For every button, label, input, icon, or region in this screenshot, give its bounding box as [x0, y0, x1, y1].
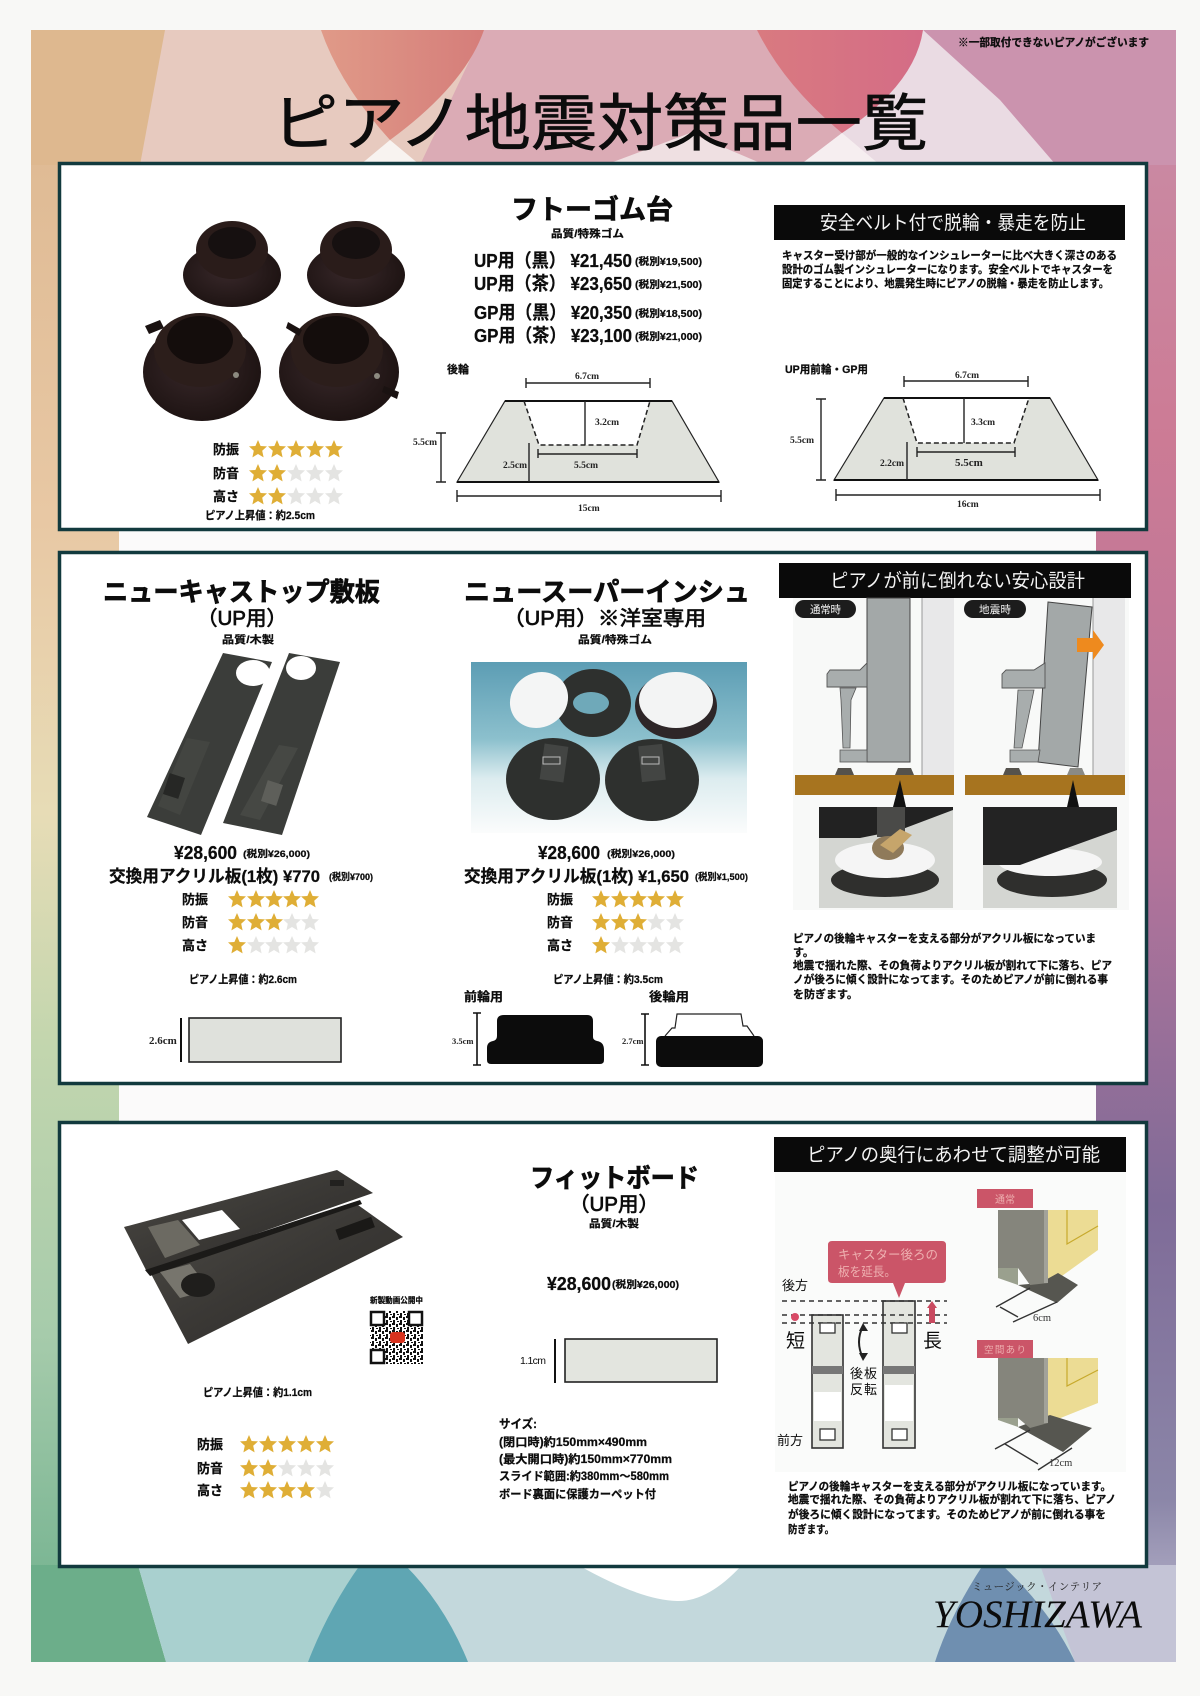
- material: 品質/木製: [589, 1217, 640, 1230]
- illustration: with space: [977, 1340, 1098, 1470]
- callout: [828, 1241, 946, 1298]
- description: [788, 1479, 1116, 1536]
- price: new castop: (税別¥700): [329, 871, 373, 883]
- diagram: front wheel and GP cross section: [785, 362, 1100, 510]
- illustration: with space: 空間あり: [984, 1345, 1026, 1356]
- price: new super insu: (税別¥1,500): [695, 871, 748, 883]
- diagram: rear wheel cross section: 2.5cm: [503, 461, 527, 471]
- description: 地震で揺れた際、その負荷よりアクリル板が割れて下に落ち、ピアノ: [788, 1492, 1116, 1506]
- lift value: new castop: ピアノ上昇値：約2.6cm: [189, 972, 297, 986]
- diagram: rear wheel profile: 後輪用: [649, 989, 689, 1004]
- rating: new castop: [182, 890, 319, 953]
- rating: [197, 1435, 334, 1498]
- diagram: front wheel and GP cross section: 2.2cm: [880, 459, 904, 469]
- title: ピアノ地震対策品一覧: [272, 90, 928, 159]
- price list: UP用（茶） ¥23,650: [474, 273, 632, 294]
- photo: super insulators: [471, 661, 747, 833]
- price list: UP用（黒） ¥21,450: [474, 250, 632, 271]
- rating: new super insu: 防音: [547, 915, 573, 930]
- banner: [779, 563, 1131, 598]
- diagram: rear wheel cross section: 5.5cm: [413, 438, 437, 448]
- description: ピアノの後輪キャスターを支える部分がアクリル板になっています。: [788, 1479, 1111, 1493]
- price: ¥28,600: [547, 1274, 611, 1294]
- label: earthquake: [964, 600, 1026, 618]
- size specification: [499, 1416, 672, 1501]
- diagram: front wheel profile: [452, 989, 604, 1065]
- description: を防ぎます。: [793, 987, 858, 1001]
- diagram: front wheel and GP cross section: 16cm: [957, 500, 979, 510]
- banner: 安全ベルト付で脱輪・暴走を防止: [820, 212, 1086, 234]
- size specification: ボード裏面に保護カーペット付: [499, 1487, 656, 1501]
- diagram: board adjustment: 後板: [850, 1366, 877, 1381]
- diagram: board thickness: 2.6cm: [149, 1035, 177, 1047]
- size specification: (最大開口時)約150mm×770mm: [499, 1452, 672, 1466]
- size specification: (閉口時)約150mm×490mm: [499, 1435, 647, 1449]
- material: 品質/特殊ゴム: [578, 633, 652, 646]
- illustration: normal position: 通常: [995, 1193, 1015, 1206]
- subtitle: （UP用）※洋室専用: [503, 607, 706, 630]
- subtitle: （UP用）: [569, 1193, 659, 1216]
- diagram: board thickness: [520, 1339, 717, 1383]
- description: 地震で揺れた際、その負荷よりアクリル板が割れて下に落ち、ピア: [793, 958, 1112, 972]
- QR code: 新製動画公開中: [370, 1295, 423, 1305]
- price: new castop: 交換用アクリル板(1枚) ¥770: [109, 866, 320, 886]
- diagram: rear wheel profile: [622, 989, 763, 1067]
- lift value: new super insu: ピアノ上昇値：約3.5cm: [553, 972, 663, 986]
- price: new castop: [109, 843, 373, 886]
- size specification: サイズ:: [499, 1416, 537, 1431]
- note: top right: ※一部取付できないピアノがございます: [958, 35, 1149, 49]
- rating: new castop: 高さ: [182, 938, 208, 953]
- price: new super insu: [464, 843, 748, 886]
- size specification: スライド範囲:約380mm～580mm: [499, 1469, 669, 1483]
- callout: キャスター後ろの: [838, 1248, 938, 1262]
- description: 設計のゴム製インシュレーターになります。安全ベルトでキャスターを: [782, 262, 1113, 276]
- illustration: normal position: [977, 1189, 1098, 1324]
- banner: [774, 205, 1125, 240]
- product title: フトーゴム台: [511, 194, 673, 225]
- logo: YOSHIZAWA: ミュージック・インテリア: [972, 1581, 1102, 1593]
- rating: 高さ: [197, 1483, 223, 1498]
- rating: new super insu: 高さ: [547, 938, 573, 953]
- description: 固定することにより、地震発生時にピアノの脱輪・暴走を防止します。: [782, 276, 1109, 290]
- material: 品質/特殊ゴム: [551, 227, 624, 240]
- arrow: tilt direction: [1077, 630, 1104, 660]
- price list: GP用（茶） ¥23,100: [474, 325, 632, 346]
- diagram: rear wheel cross section: 15cm: [578, 504, 600, 514]
- diagram: front wheel and GP cross section: 5.5cm: [790, 436, 814, 446]
- diagram: rear wheel cross section: 3.2cm: [595, 418, 619, 428]
- callout: 板を延長。: [838, 1265, 896, 1279]
- description: す。: [793, 946, 814, 959]
- price: (税別¥26,000): [612, 1278, 679, 1291]
- diagram: board thickness: 1.1cm: [520, 1355, 546, 1367]
- rating: 防振 防音 高さ: 防音: [213, 466, 239, 481]
- diagram: front wheel profile: 3.5cm: [452, 1036, 473, 1046]
- price: [547, 1274, 679, 1294]
- illustration: with space: 12cm: [1049, 1458, 1072, 1469]
- icon: wooden boards photo: [147, 653, 340, 835]
- price list: (税別¥21,000): [635, 330, 702, 343]
- photo: fit board: [124, 1170, 403, 1344]
- banner: [774, 1137, 1126, 1172]
- rating: 防音: [197, 1461, 223, 1476]
- diagram: board adjustment: 反転: [850, 1382, 877, 1397]
- lift value: ピアノ上昇値：約1.1cm: [203, 1385, 312, 1399]
- banner: ピアノが前に倒れない安心設計: [830, 570, 1085, 592]
- price list: (税別¥19,500): [635, 255, 702, 268]
- rating: new castop: 防振: [182, 892, 208, 907]
- price: new super insu: 交換用アクリル板(1枚) ¥1,650: [464, 866, 689, 886]
- banner: ピアノの奥行にあわせて調整が可能: [807, 1144, 1100, 1166]
- lift value: ピアノ上昇値：約2.5cm: [205, 508, 315, 522]
- illustration: piano normal vs earthquake: [793, 598, 1129, 910]
- photo: caster earthquake: [983, 780, 1117, 908]
- description: [793, 931, 1112, 1001]
- product title: new super insu: ニュースーパーインシュ: [464, 577, 750, 607]
- price list: (税別¥21,500): [635, 278, 702, 291]
- product title: フィットボード: [530, 1163, 699, 1193]
- price: new super insu: (税別¥26,000): [607, 848, 675, 860]
- panel: フトーゴム台: [60, 164, 1146, 530]
- piano: normal: [827, 598, 954, 775]
- price: new castop: (税別¥26,000): [243, 848, 310, 860]
- description: ピアノの後輪キャスターを支える部分がアクリル板になっていま: [793, 931, 1096, 945]
- description: が後ろに傾く設計になってます。そのためピアノが前に倒れる事を: [788, 1507, 1106, 1521]
- rating: 防振 防音 高さ: 防振: [213, 442, 239, 457]
- subtitle: （UP用）: [197, 607, 287, 630]
- label: normal: [795, 600, 856, 618]
- diagram: rear wheel profile: 2.7cm: [622, 1036, 643, 1046]
- diagram: front wheel and GP cross section: UP用前輪・GP用: [785, 362, 868, 376]
- product title: new castop: ニューキャストップ敷板: [103, 577, 380, 607]
- price list: (税別¥18,500): [635, 307, 702, 320]
- illustration: normal position: 6cm: [1033, 1313, 1051, 1324]
- description: 防ぎます。: [788, 1522, 834, 1536]
- panel: フィットボード: [60, 1122, 1146, 1566]
- diagram: rear wheel cross section: 5.5cm: [574, 461, 598, 471]
- diagram: board adjustment: 後方: [782, 1278, 808, 1293]
- QR code: [370, 1295, 423, 1364]
- diagram: board adjustment: 短: [786, 1330, 805, 1352]
- diagram: front wheel and GP cross section: 5.5cm: [955, 457, 983, 469]
- diagram: rear wheel cross section: [413, 362, 721, 514]
- diagram: board adjustment: 長: [923, 1331, 942, 1352]
- price: new castop: ¥28,600: [174, 843, 237, 863]
- description: [782, 248, 1117, 290]
- rating: new castop: 防音: [182, 915, 208, 930]
- piano: earthquake: [1002, 598, 1125, 775]
- diagram: front wheel and GP cross section: 3.3cm: [971, 418, 995, 428]
- price: new super insu: ¥28,600: [538, 843, 600, 863]
- diagram: board adjustment: [775, 1172, 1126, 1472]
- label: normal: 通常時: [810, 603, 842, 616]
- diagram: rear wheel cross section: 後輪: [447, 362, 469, 376]
- price list: GP用（黒） ¥20,350: [474, 302, 632, 323]
- diagram: board thickness: [149, 1018, 341, 1062]
- photo: caster normal: [819, 780, 953, 908]
- price list: [474, 250, 702, 346]
- rating: 防振 防音 高さ: 高さ: [213, 489, 239, 504]
- rating: new super insu: [547, 890, 684, 953]
- label: earthquake: 地震時: [979, 603, 1012, 616]
- diagram: rear wheel cross section: 6.7cm: [575, 372, 599, 382]
- rating: new super insu: 防振: [547, 892, 573, 907]
- icon: rubber insulators photo: [143, 221, 405, 421]
- material: 品質/木製: [222, 633, 275, 646]
- rating: 防振: [197, 1437, 223, 1452]
- panel: ニューキャストップ敷板 / ニュースーパーインシュ: [60, 552, 1146, 1084]
- diagram: board adjustment: 前方: [777, 1433, 803, 1448]
- description: キャスター受け部が一般的なインシュレーターに比べ大きく深さのある: [782, 248, 1117, 262]
- rating: 防振 防音 高さ: [213, 440, 343, 504]
- diagram: front wheel and GP cross section: 6.7cm: [955, 371, 979, 381]
- diagram: front wheel profile: 前輪用: [464, 989, 503, 1004]
- description: ノが後ろに傾く設計になってます。そのためピアノが前に倒れる事: [793, 972, 1108, 986]
- logo: YOSHIZAWA: YOSHIZAWA: [933, 1593, 1142, 1636]
